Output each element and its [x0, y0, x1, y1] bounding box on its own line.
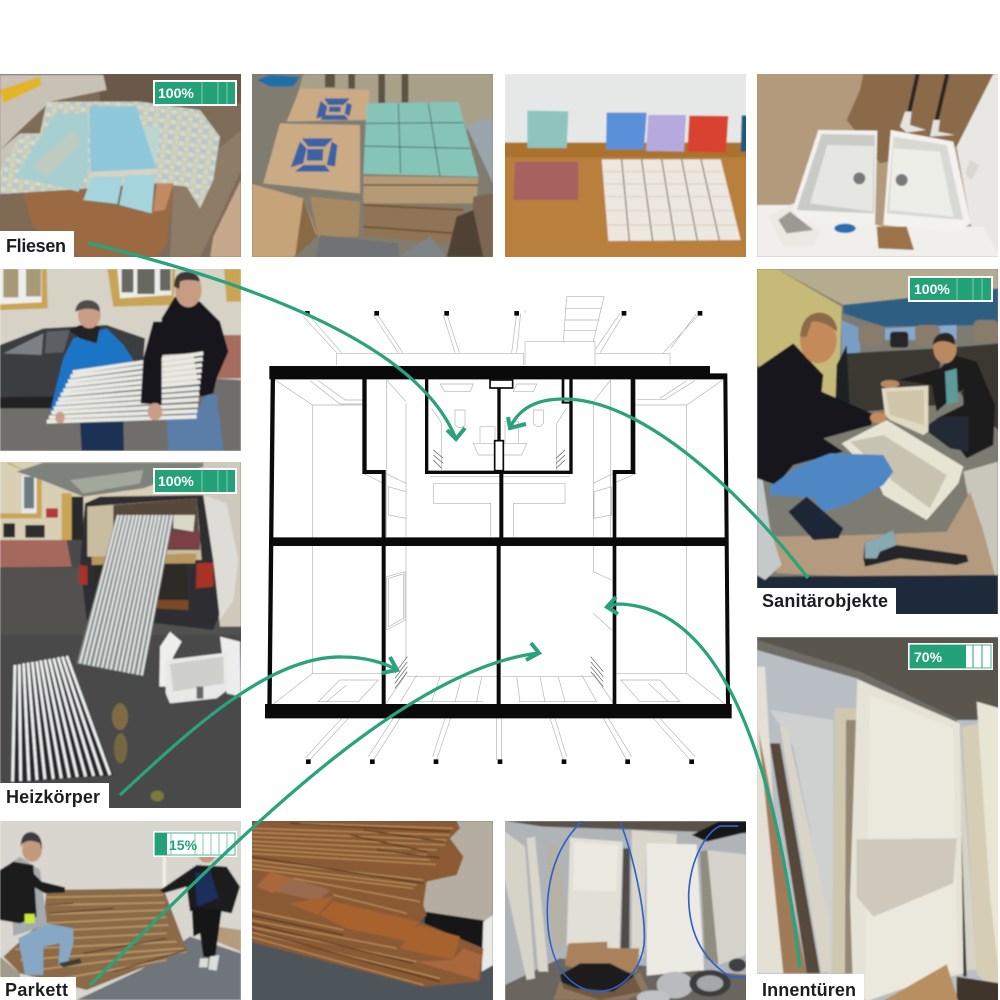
progress badge: Innentüren 70% — [908, 643, 993, 670]
label: Fliesen — [0, 231, 74, 259]
floor plan — [265, 297, 732, 764]
progress badge: Parkett 15% — [153, 831, 237, 857]
photo: two sinks — [757, 74, 998, 257]
progress badge: Innentüren 70%: 70% — [914, 649, 943, 665]
photo: doors in storage with blue cable — [505, 821, 746, 1000]
arrow: Sanitärobjekte to bathroom — [508, 399, 808, 578]
label: Parkett: Parkett — [5, 980, 68, 1000]
label: Heizkörper — [0, 783, 109, 810]
progress badge: Sanitärobjekte 100% — [908, 276, 993, 302]
plan: radiators hatching — [395, 450, 603, 688]
photo: stacked interior doors — [757, 637, 998, 1000]
progress badge: Heizkörper 100% — [153, 468, 237, 494]
photo: parquet boards close-up — [252, 821, 493, 1000]
plan: shaft bottom — [495, 441, 503, 471]
plan: thin interior and exterior lines — [273, 297, 725, 762]
plan: thick black walls — [265, 366, 732, 718]
label: Innentüren: Innentüren — [762, 980, 856, 1000]
progress badge: Sanitärobjekte 100%: 100% — [914, 281, 950, 297]
progress badge: Fliesen 100% — [153, 80, 237, 106]
photo: van with radiators and sink — [0, 462, 241, 808]
arrow: Heizkörper to radiator — [120, 657, 397, 795]
plan: posts — [305, 311, 702, 764]
photo: two men with parquet pile — [0, 821, 241, 1000]
photo: two men carrying radiator — [0, 269, 241, 451]
photo: tile stacks on pallet — [252, 74, 493, 257]
arrow: Innentüren to door — [607, 597, 800, 968]
label: Innentüren — [757, 974, 864, 1000]
photo: tile samples on boxes — [0, 74, 241, 257]
photo: men with sinks in van — [757, 269, 998, 614]
photo: colored tile samples on table — [505, 74, 746, 257]
label: Fliesen: Fliesen — [6, 236, 66, 256]
progress badge: Fliesen 100%: 100% — [158, 85, 194, 101]
arrow: Parkett to floor — [90, 643, 539, 985]
plan: shaft top — [490, 380, 513, 388]
label: Heizkörper: Heizkörper — [6, 787, 100, 807]
label: Sanitärobjekte — [757, 588, 896, 615]
progress badge: Parkett 15%: 15% — [169, 837, 198, 853]
arrow: Fliesen to bathroom — [88, 243, 465, 439]
progress badge: Heizkörper 100%: 100% — [158, 473, 194, 489]
label: Sanitärobjekte: Sanitärobjekte — [762, 591, 888, 611]
